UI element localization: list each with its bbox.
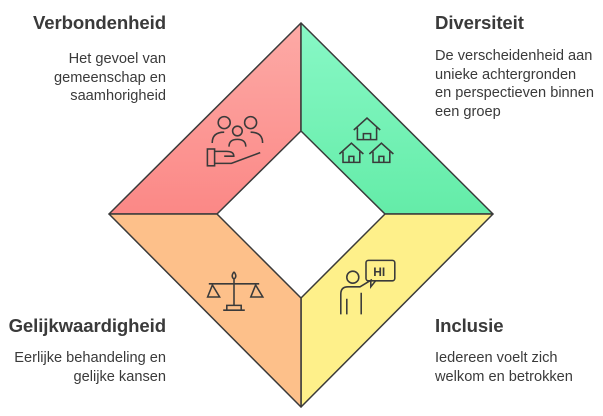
heading: Diversiteit: Diversiteit: [435, 12, 524, 33]
icon: person saying hi: HI: [373, 265, 385, 279]
text: verbondenheid: gemeenschap en: [54, 70, 166, 86]
text: verbondenheid: saamhorigheid: [70, 88, 166, 104]
icon: person saying hi: [341, 260, 395, 314]
text: inclusie: [435, 350, 573, 384]
text: diversiteit: en perspectieven binnen: [435, 85, 594, 101]
panel: inclusie: [301, 214, 493, 407]
heading: Inclusie: Inclusie: [435, 315, 503, 336]
text: diversiteit: unieke achtergronden: [435, 66, 576, 82]
text: diversiteit: [435, 48, 594, 120]
text: verbondenheid: Het gevoel van: [69, 51, 166, 67]
heading: Gelijkwaardigheid: Gelijkwaardigheid: [9, 315, 166, 336]
text: verbondenheid: [54, 51, 166, 104]
icon: people in hand: [207, 117, 263, 166]
text: diversiteit: een groep: [435, 104, 501, 120]
panel: diversiteit: [301, 23, 493, 214]
text: inclusie: Iedereen voelt zich: [435, 350, 558, 366]
heading: Verbondenheid: Verbondenheid: [33, 12, 166, 33]
text: inclusie: welkom en betrokken: [435, 368, 573, 384]
text: gelijkwaardigheid: [14, 350, 166, 384]
text: diversiteit: De verscheidenheid aan: [435, 48, 592, 64]
panel: verbondenheid: [109, 23, 301, 214]
text: gelijkwaardigheid: Eerlijke behandeling en: [14, 350, 166, 366]
text: gelijkwaardigheid: gelijke kansen: [74, 368, 166, 384]
panel: gelijkwaardigheid: [109, 214, 301, 407]
icon: scales: [208, 272, 263, 310]
icon: houses: [339, 118, 393, 162]
